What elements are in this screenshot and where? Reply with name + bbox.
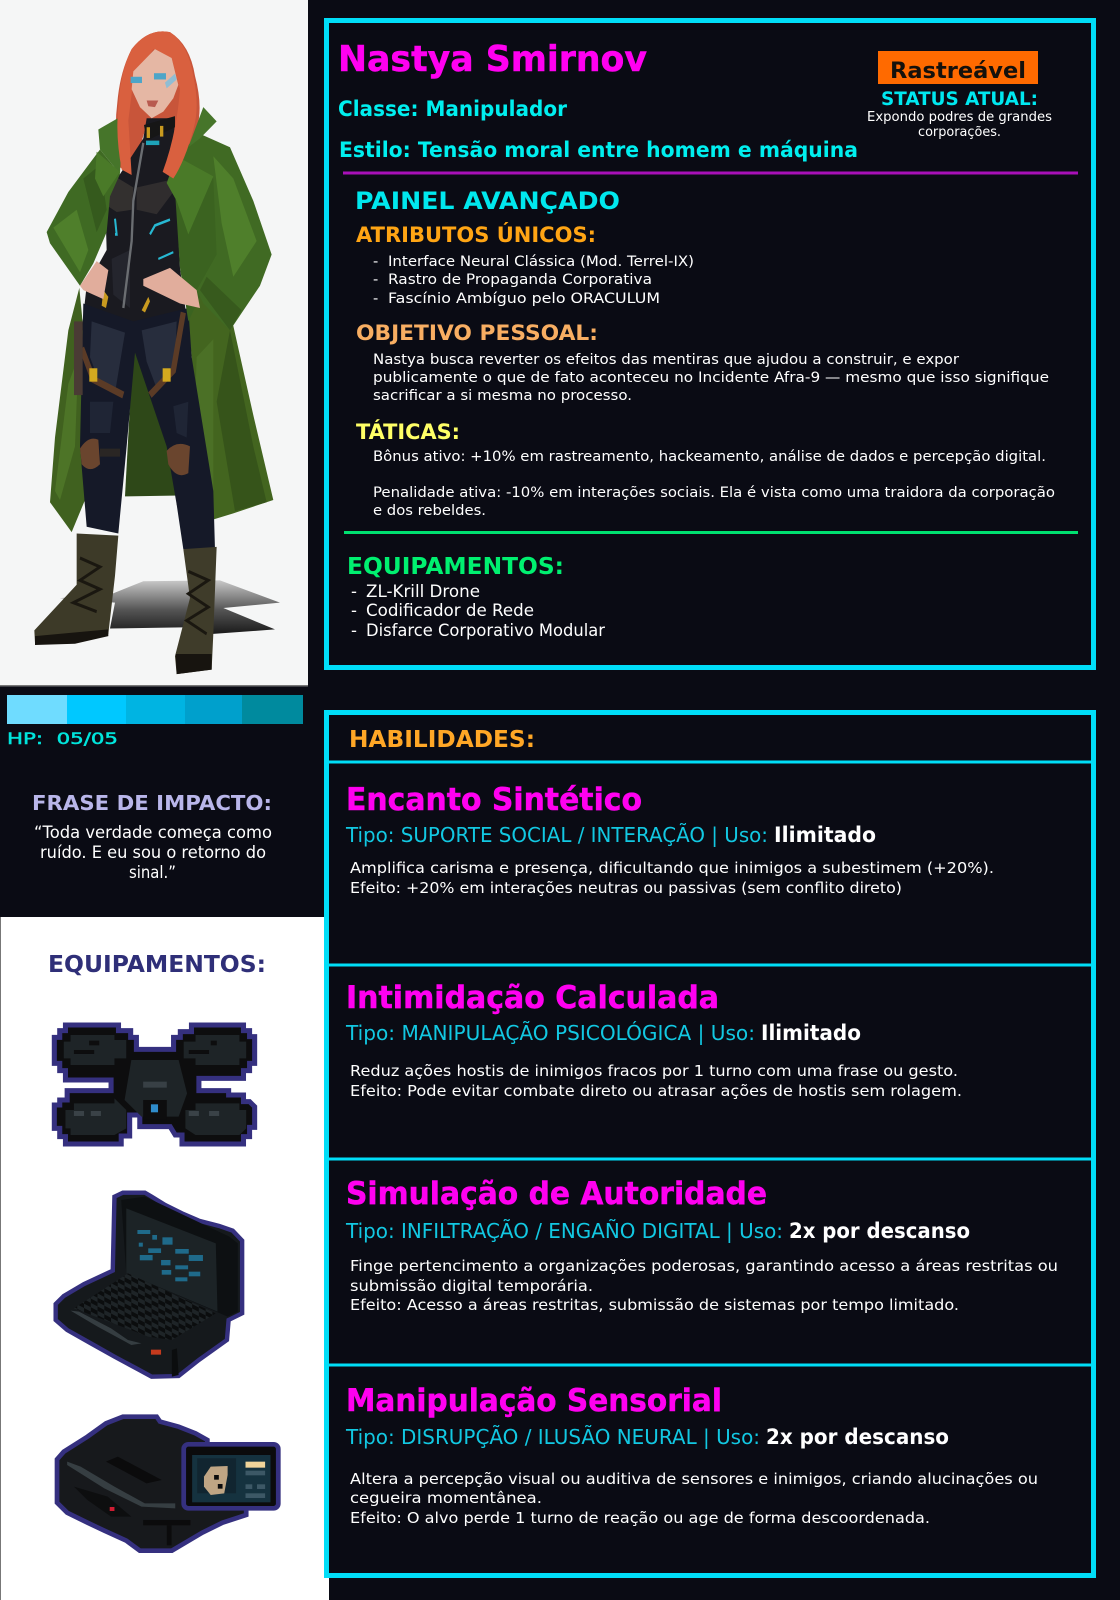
- unique attributes: ATRIBUTOS ÚNICOS:: [356, 222, 596, 248]
- personal goal: sacrificar a si mesma no processo.: [373, 387, 632, 404]
- hair back: [116, 31, 200, 181]
- skill: Intimidação Calculada: Intimidação Calculada: [346, 980, 719, 1016]
- tactics: Bônus ativo: +10% em rastreamento, hackeamento, análise de dados e percepção digital.: [373, 448, 1046, 465]
- hair front: [117, 31, 197, 179]
- equipment list: -: [351, 601, 357, 620]
- character name: Nastya Smirnov: [338, 39, 647, 80]
- skill: Intimidação Calculada: Efeito: Pode evitar combate direto ou atrasar ações de hostis sem rolagem.: [350, 1082, 962, 1100]
- face: [132, 49, 178, 118]
- coat left arm: [47, 150, 120, 286]
- coat lower left: [50, 288, 86, 532]
- unique attributes: Fascínio Ambíguo pelo ORACULUM: [388, 290, 660, 307]
- icon: laptop: [56, 1193, 242, 1377]
- unique attributes: Rastro de Propaganda Corporativa: [388, 271, 652, 288]
- skill: Encanto Sintético: Efeito: +20% em interações neutras ou passivas (sem conflito direto): [350, 879, 902, 897]
- coat lower right: [177, 290, 273, 528]
- impact phrase: sinal.”: [129, 863, 176, 882]
- skill: Simulação de Autoridade: Simulação de Autoridade: [346, 1176, 767, 1212]
- skill: Simulação de Autoridade: 2x por descanso: [789, 1219, 970, 1243]
- skill: Simulação de Autoridade: Finge pertencimento a organizações poderosas, garantindo acesso a áreas restritas ou: [350, 1257, 1058, 1275]
- personal goal: OBJETIVO PESSOAL:: [356, 321, 598, 346]
- icon: corporate disguise: [57, 1417, 278, 1551]
- legs: [80, 304, 215, 549]
- skill: Manipulação Sensorial: Altera a percepção visual ou auditiva de sensores e inimigos, criando alucinações ou: [350, 1470, 1038, 1488]
- equipment panel: [0, 917, 329, 1600]
- skill: Intimidação Calculada: Reduz ações hostis de inimigos fracos por 1 turno com uma frase ou gesto.: [350, 1062, 958, 1080]
- advanced panel heading: PAINEL AVANÇADO: [355, 187, 620, 215]
- personal goal: publicamente o que de fato aconteceu no Incidente Afra-9 — mesmo que isso signifique: [373, 369, 1049, 386]
- lapel: [167, 156, 213, 234]
- hands: [80, 261, 108, 299]
- style: Estilo: Tensão moral entre homem e máquina: [339, 138, 858, 162]
- skill: Manipulação Sensorial: [345, 1383, 1038, 1527]
- impact phrase: FRASE DE IMPACTO:: [32, 791, 272, 815]
- panel: skills: [326, 712, 1094, 1576]
- equipment list: Disfarce Corporativo Modular: [366, 621, 605, 640]
- skill: Encanto Sintético: [345, 782, 994, 897]
- coat back between legs: [125, 344, 180, 496]
- tactics: TÁTICAS:: [356, 419, 460, 445]
- skill: Encanto Sintético: Ilimitado: [774, 823, 876, 847]
- coat front right: [173, 165, 223, 321]
- equipment list: Codificador de Rede: [366, 601, 534, 620]
- tactics: Penalidade ativa: -10% em interações sociais. Ela é vista como uma traidora da corporação: [373, 484, 1055, 501]
- shadow: [60, 580, 280, 634]
- status block: corporações.: [918, 125, 1001, 140]
- status block: Expondo podres de grandes: [867, 110, 1052, 125]
- impact phrase: ruído. E eu sou o retorno do: [40, 843, 266, 862]
- skill: Intimidação Calculada: Ilimitado: [761, 1021, 861, 1045]
- tactics: e dos rebeldes.: [373, 502, 486, 519]
- skill: Encanto Sintético: Encanto Sintético: [346, 782, 642, 818]
- character portrait panel: [0, 0, 308, 686]
- equipment list: EQUIPAMENTOS:: [347, 554, 564, 580]
- class: Classe: Manipulador: [338, 97, 568, 121]
- personal goal: [356, 321, 1049, 404]
- skill: Manipulação Sensorial: Efeito: O alvo perde 1 turno de reação ou age de forma descoordenada.: [350, 1509, 930, 1527]
- skills heading: HABILIDADES:: [349, 727, 535, 753]
- thigh straps: [82, 348, 123, 395]
- impact phrase: [32, 791, 272, 882]
- skill: Manipulação Sensorial: 2x por descanso: [766, 1425, 949, 1449]
- skill: Manipulação Sensorial: Tipo: DISRUPÇÃO / ILUSÃO NEURAL | Uso:: [345, 1425, 760, 1449]
- skill: Simulação de Autoridade: submissão digital temporária.: [350, 1277, 593, 1295]
- coat right arm: [177, 134, 272, 330]
- body suit torso: [82, 118, 188, 330]
- unique attributes: [356, 222, 694, 307]
- equipment heading: EQUIPAMENTOS:: [48, 952, 266, 978]
- skill: Encanto Sintético: Tipo: SUPORTE SOCIAL / INTERAÇÃO | Uso:: [345, 823, 768, 847]
- tactics: [356, 419, 1055, 519]
- skill: Manipulação Sensorial: cegueira momentânea.: [350, 1489, 542, 1507]
- knee pads: [80, 439, 100, 469]
- icon: drone: [54, 1025, 255, 1144]
- equipment list: ZL-Krill Drone: [366, 582, 480, 601]
- unique attributes: -: [373, 271, 378, 288]
- HP label: HP: 05/05: [7, 729, 118, 748]
- unique attributes: -: [373, 290, 378, 307]
- skill: Intimidação Calculada: Tipo: MANIPULAÇÃO PSICOLÓGICA | Uso:: [345, 1021, 755, 1045]
- unique attributes: -: [373, 253, 378, 270]
- unique attributes: Interface Neural Clássica (Mod. Terrel-IX): [388, 253, 694, 270]
- skill: Simulação de Autoridade: Tipo: INFILTRAÇÃO / ENGAÑO DIGITAL | Uso:: [345, 1219, 783, 1243]
- status block: Rastreável: [890, 59, 1026, 84]
- personal goal: Nastya busca reverter os efeitos das mentiras que ajudou a construir, e expor: [373, 351, 959, 368]
- status block: STATUS ATUAL:: [881, 88, 1038, 110]
- skill: Encanto Sintético: Amplifica carisma e presença, dificultando que inimigos a subestimem (+20%).: [350, 859, 994, 877]
- coat collars: [98, 117, 122, 174]
- status block: [867, 51, 1052, 140]
- equipment list: -: [351, 621, 357, 640]
- skill: Simulação de Autoridade: [345, 1176, 1058, 1314]
- skill: Manipulação Sensorial: Manipulação Sensorial: [346, 1383, 722, 1419]
- cyan suit accents and collar: [144, 116, 175, 141]
- HP bar: [7, 695, 303, 724]
- equipment list: [347, 554, 605, 640]
- skill: Simulação de Autoridade: Efeito: Acesso a áreas restritas, submissão de sistemas por tempo limitado.: [350, 1296, 959, 1314]
- impact phrase: “Toda verdade começa como: [34, 823, 272, 842]
- equipment list: -: [351, 582, 357, 601]
- skill: Intimidação Calculada: [345, 980, 962, 1100]
- boots: [34, 533, 118, 643]
- panel: character sheet: [326, 20, 1094, 668]
